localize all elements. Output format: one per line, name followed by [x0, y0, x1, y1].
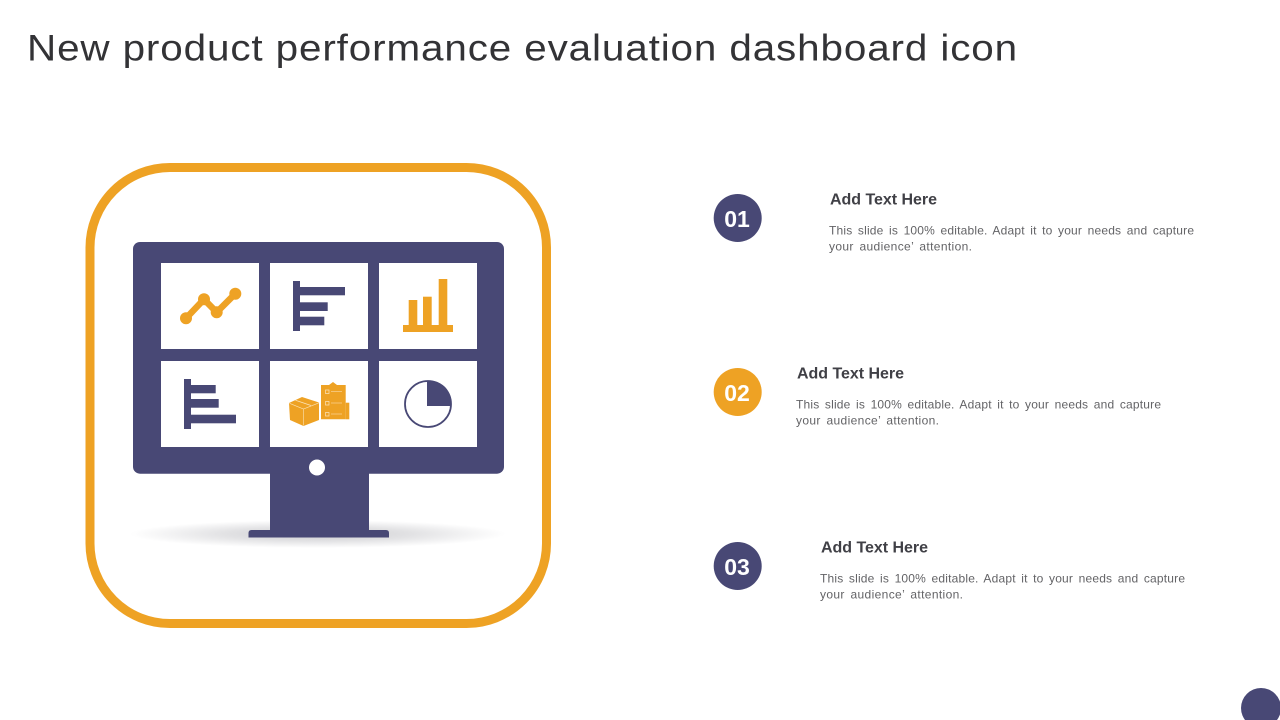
body 02: your audience’ attention.	[796, 414, 939, 428]
monitor stand	[248, 472, 389, 538]
monitor power button	[309, 460, 325, 476]
body 02	[796, 398, 1161, 428]
tile: horizontal bars descending	[270, 263, 368, 349]
title: New product performance evaluation dashboard icon	[27, 28, 1018, 68]
heading 03: Add Text Here	[821, 540, 928, 556]
body 02: This slide is 100% editable. Adapt it to your needs and capture	[796, 398, 1161, 412]
monitor screen	[133, 242, 504, 474]
badge 01: 01	[724, 206, 750, 232]
body 01: your audience’ attention.	[829, 240, 972, 254]
body 03: This slide is 100% editable. Adapt it to your needs and capture	[820, 572, 1185, 586]
tile: column chart	[379, 263, 477, 349]
monitor shadow	[130, 520, 506, 548]
tile: pie chart	[379, 361, 477, 447]
badge 02	[714, 368, 762, 416]
tile: horizontal bars ascending	[161, 361, 259, 447]
item 02	[714, 366, 1161, 428]
body 03	[820, 572, 1185, 602]
badge 02: 02	[724, 380, 750, 406]
tile: box and checklist	[270, 361, 368, 447]
tile: line chart	[161, 263, 259, 349]
heading 02: Add Text Here	[797, 366, 904, 382]
panel: icon frame with monitor	[90, 168, 546, 624]
badge 01	[714, 194, 762, 242]
rounded orange frame	[90, 168, 546, 624]
item 03	[714, 540, 1185, 602]
body 03: your audience’ attention.	[820, 588, 963, 602]
badge 03: 03	[724, 554, 750, 580]
badge 03	[714, 542, 762, 590]
body 01: This slide is 100% editable. Adapt it to your needs and capture	[829, 224, 1194, 238]
body 01	[829, 224, 1194, 254]
heading 01: Add Text Here	[830, 192, 937, 208]
corner circle	[1241, 688, 1280, 720]
item 01	[714, 192, 1194, 254]
